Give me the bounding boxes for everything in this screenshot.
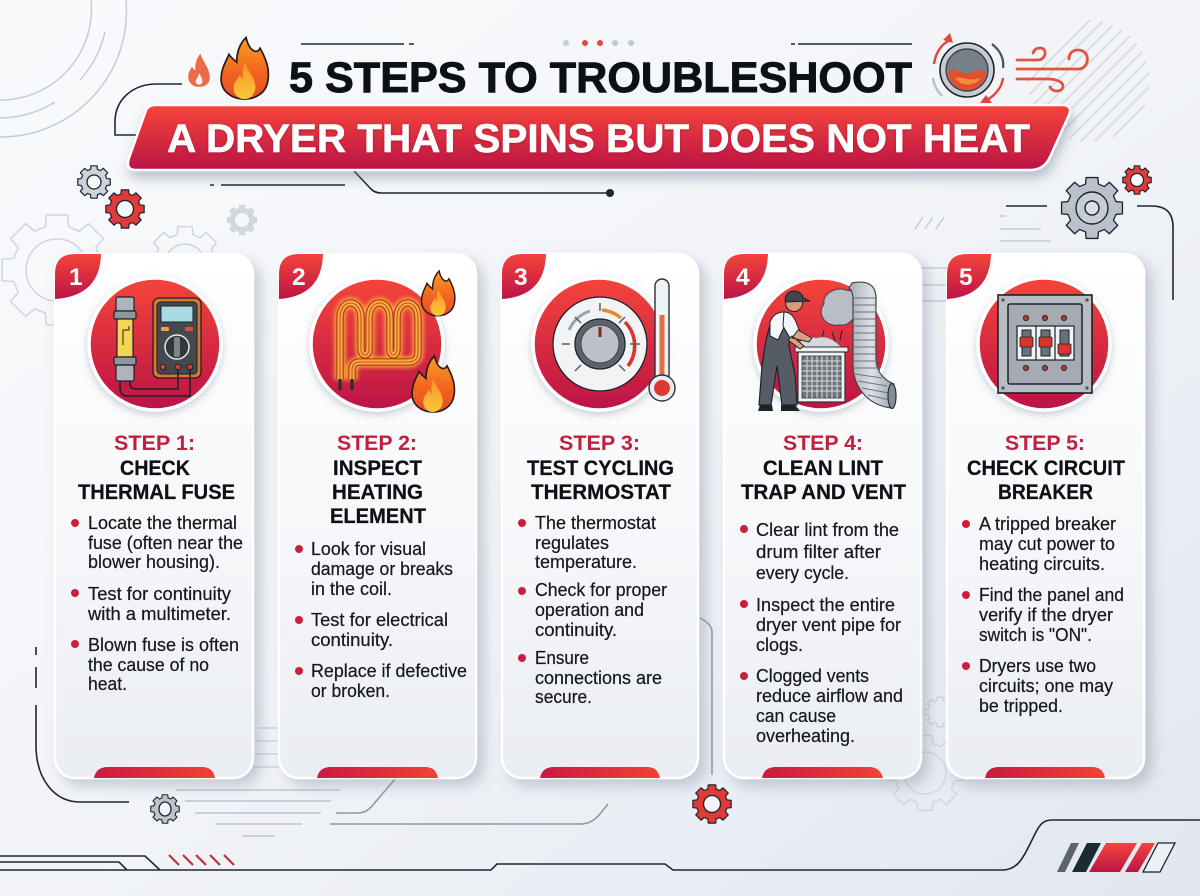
step 5 heading: CHECK CIRCUIT [967,456,1125,480]
step 4 bullets: Clear lint from the [756,519,899,540]
step 5 bullets: circuits; one may [979,675,1114,696]
step 1 tab [94,767,215,778]
step 5 bullets: heating circuits. [979,553,1105,574]
badge 3: 3 [514,264,528,291]
step 2 bullets [295,538,467,701]
progress dots [563,40,634,46]
icon: airflow [1017,48,1087,91]
red tick marks [169,855,234,865]
step 4 bullets: reduce airflow and [756,685,903,706]
panel: step 5 [947,254,1144,778]
step 4 heading: STEP 4: [783,431,863,455]
icon: technician cleaning lint [755,278,896,411]
step 2 tab [317,767,438,778]
panel: step 3 [502,254,698,778]
icon: small flame [188,54,210,87]
icon: red gear top right [1123,166,1151,194]
step 1 bullets: fuse (often near the [88,532,243,553]
step 4 bullets: dryer vent pipe for [756,614,901,635]
step 1 bullets: Blown fuse is often [88,634,239,655]
badge 4: 4 [736,264,750,291]
step 2 heading [330,431,426,528]
step 1 bullets: the cause of no [88,654,209,675]
step 2 bullets: damage or breaks [311,558,453,579]
step 4 bullets: clogs. [756,634,803,655]
banner text: A DRYER THAT SPINS BUT DOES NOT HEAT [167,117,1030,161]
icon: dryer drum [933,33,1003,103]
step 3 heading: STEP 3: [559,431,640,455]
step 1 bullets [71,512,243,694]
icon: large grey gear [1062,178,1122,238]
step 1 bullets: blower housing). [88,551,220,572]
step 3 bullets: regulates [535,532,609,553]
badge 2 [279,254,323,299]
step 4 heading [741,431,906,504]
title banner [128,105,1070,170]
icon: circuit breaker panel [978,278,1110,410]
title line 1: 5 STEPS TO TROUBLESHOOT [289,54,912,102]
step 5 bullets: be tripped. [979,695,1063,716]
step 4 bullets: every cycle. [756,562,849,583]
step 3 bullets: connections are [535,667,662,688]
step 5 bullets [962,513,1124,716]
step 5 heading: BREAKER [998,480,1093,504]
step 2 heading: STEP 2: [337,431,417,455]
step 4 bullets: Inspect the entire [756,594,895,615]
step 5 heading [967,431,1125,504]
badge 3 [502,254,546,299]
step 2 heading: HEATING [332,480,423,504]
step 3 bullets: temperature. [535,551,637,572]
step 5 bullets: Dryers use two [979,655,1096,676]
step 1 bullets: heat. [88,673,127,694]
step 5 bullets: may cut power to [979,533,1115,554]
icon: large flame [221,38,268,99]
step 4 bullets: drum filter after [756,541,881,562]
step 2 bullets: or broken. [311,680,390,701]
icon: thermostat dial and thermometer [533,278,675,410]
step 2 bullets: continuity. [311,629,393,650]
step 2 bullets: Look for visual [311,538,426,559]
step 4 bullets: Clogged vents [756,665,869,686]
badge 2: 2 [292,264,306,291]
step 4 tab [762,767,883,778]
step 2 heading: ELEMENT [330,504,426,528]
step 3 bullets: Ensure [535,647,589,668]
step 2 bullets: in the coil. [311,578,392,599]
step 1 bullets: Test for continuity [88,583,232,604]
step 3 bullets [518,512,667,707]
badge 5: 5 [959,264,973,291]
icon: pale gear [227,205,257,235]
step 3 bullets: secure. [535,686,592,707]
badge 1 [55,254,101,299]
step 1 heading: STEP 1: [114,431,195,455]
icon: heating element [311,271,455,412]
step 4 bullets: can cause [756,705,836,726]
step 2 heading: INSPECT [333,456,422,480]
panel: step 1 [55,254,253,778]
badge 1: 1 [69,264,83,291]
icon: fuse and multimeter [89,278,221,410]
step 1 heading [78,431,235,504]
background outline gears [2,215,962,810]
icon: small grey gear [78,166,110,198]
logo stripes bottom right [1057,843,1175,872]
step 1 heading: THERMAL FUSE [78,480,235,504]
step 2 bullets: Test for electrical [311,609,448,630]
icon: grey gear bottom [151,795,179,823]
step 1 bullets: Locate the thermal [88,512,237,533]
step 3 bullets: continuity. [535,619,617,640]
icon: small red gear [106,190,144,228]
step 5 bullets: A tripped breaker [979,513,1116,534]
step 4 heading: CLEAN LINT [763,456,883,480]
step 3 tab [540,767,660,778]
step 4 heading: TRAP AND VENT [741,480,906,504]
panel: step 4 [724,254,921,778]
hatched circle top-right [1028,20,1150,142]
panel: step 2 [279,254,476,778]
step 3 heading: THERMOSTAT [531,480,671,504]
step 2 bullets: Replace if defective [311,660,467,681]
step 3 bullets: Check for proper [535,579,667,600]
step 5 bullets: Find the panel and [979,584,1124,605]
step 3 heading [527,431,674,504]
step 5 heading: STEP 5: [1005,431,1085,455]
step 1 heading: CHECK [120,456,190,480]
decorative concentric arcs top-left [0,0,126,137]
step 3 bullets: The thermostat [535,512,656,533]
step 3 heading: TEST CYCLING [527,456,674,480]
step 4 bullets: overheating. [756,725,855,746]
icon: red gear bottom [693,785,731,823]
step 5 tab [985,767,1105,778]
step 5 bullets: switch is "ON". [979,624,1092,645]
step 5 bullets: verify if the dryer [979,604,1113,625]
step 1 bullets: with a multimeter. [87,603,231,624]
badge 4 [724,254,768,299]
step 4 bullets [740,519,903,746]
step 3 bullets: operation and [535,599,644,620]
badge 5 [947,254,991,299]
